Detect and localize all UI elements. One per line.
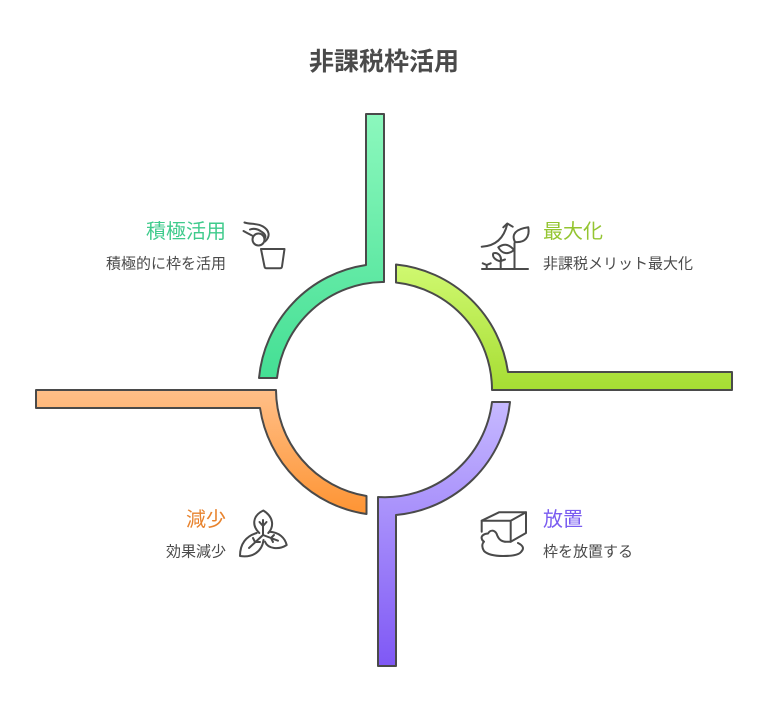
heading: maximize: 最大化 xyxy=(543,220,603,243)
icon: hand dropping coin into cup xyxy=(244,222,284,268)
segment: orange arm xyxy=(36,390,366,514)
heading: active use: 積極活用 xyxy=(146,220,226,243)
text: maximize description: 非課税メリット最大化 xyxy=(543,256,693,272)
icon: growing plants with arrow xyxy=(482,224,529,269)
icon: dusty box xyxy=(482,512,526,556)
label: leave unused xyxy=(543,508,633,560)
segment: purple arm xyxy=(378,402,510,666)
heading: leave unused: 放置 xyxy=(543,508,583,531)
title: 非課税枠活用 xyxy=(309,48,459,76)
segment: lime arm xyxy=(396,264,732,390)
label: reduced xyxy=(166,508,226,560)
icon: three leaves xyxy=(240,510,287,556)
text: leave unused description: 枠を放置する xyxy=(543,544,633,560)
text: reduced description: 効果減少 xyxy=(166,544,226,560)
text: active use description: 積極的に枠を活用 xyxy=(106,256,226,272)
segment: green arm xyxy=(259,114,384,378)
heading: reduced: 減少 xyxy=(186,508,226,531)
label: active use xyxy=(106,220,226,272)
label: maximize xyxy=(543,220,693,272)
